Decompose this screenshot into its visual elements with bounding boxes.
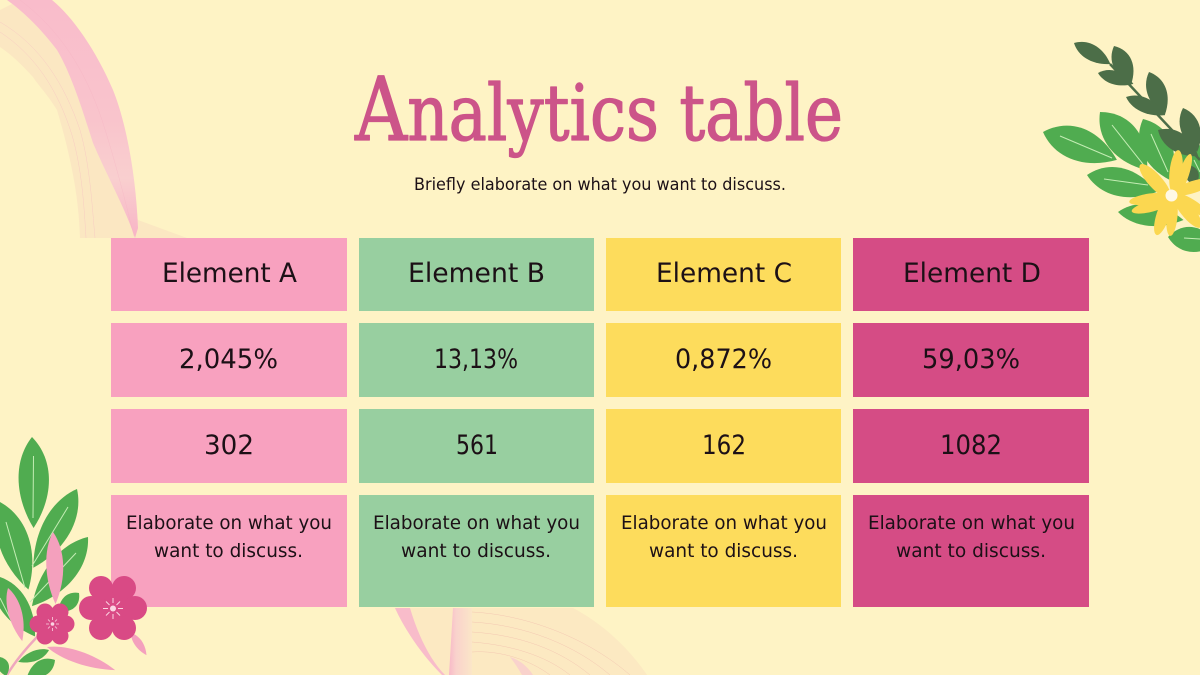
decorative wave: top left (0, 0, 187, 238)
column: Element D: Elaborate on what you (868, 512, 1075, 534)
column: Element B: 13,13% (434, 344, 518, 375)
column: Element A: want to discuss. (154, 540, 303, 562)
flower centre (1166, 190, 1178, 202)
small pink flower (30, 604, 74, 644)
column: Element C: want to discuss. (649, 540, 798, 562)
column: Element B: 561 (456, 430, 498, 461)
title: Analytics table (354, 58, 843, 161)
icon: foliage and pink flowers, bottom left (0, 437, 150, 675)
column: Element C: 0,872% (675, 344, 772, 375)
column: Element C: Elaborate on what you (621, 512, 827, 534)
column: Element A: Elaborate on what you (126, 512, 332, 534)
decorative wave: bottom centre (395, 608, 647, 675)
column: Element C (606, 238, 841, 607)
column: Element D: want to discuss. (896, 540, 1046, 562)
column: Element A (111, 238, 347, 607)
column: Element C: Element C (656, 258, 792, 289)
column: Element D: 1082 (940, 430, 1002, 461)
column: Element B (359, 238, 594, 607)
table (111, 238, 1089, 607)
column: Element B: Element B (408, 258, 545, 289)
column: Element A: 302 (204, 430, 254, 461)
column: Element A: 2,045% (179, 344, 278, 375)
column: Element B: Elaborate on what you (373, 512, 580, 534)
large pink flower (79, 576, 147, 640)
column: Element D: Element D (903, 258, 1041, 289)
icon: foliage and yellow flower, top right (1038, 36, 1200, 255)
column: Element D (853, 238, 1089, 607)
column: Element B: want to discuss. (401, 540, 551, 562)
subtitle: Briefly elaborate on what you want to discuss. (414, 175, 786, 194)
column: Element C: 162 (702, 430, 746, 461)
column: Element D: 59,03% (922, 344, 1020, 375)
column: Element A: Element A (162, 258, 298, 289)
